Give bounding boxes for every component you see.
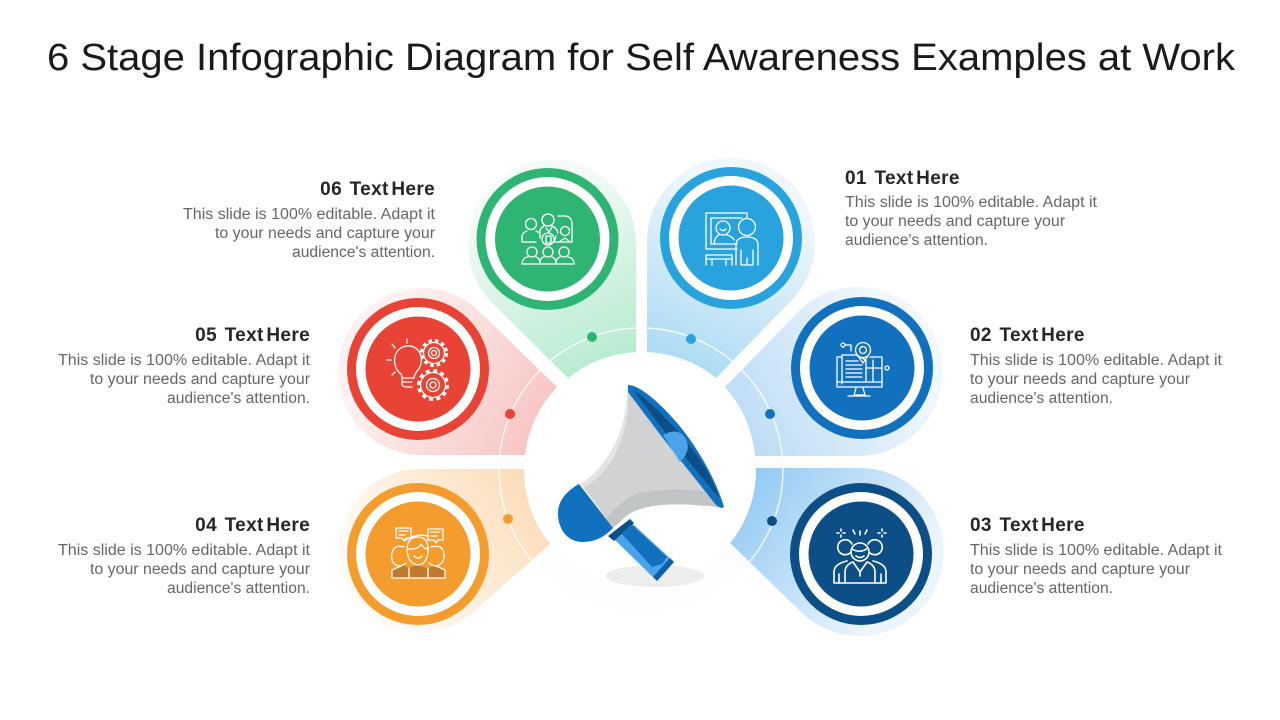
text block: 02 [970, 325, 1223, 407]
icon: three people talking [392, 528, 445, 578]
megaphone shadow [606, 565, 704, 587]
text block: 03: audience's attention. [970, 580, 1113, 597]
text block: 05 [58, 325, 311, 407]
petal: stage 04 orange [339, 469, 550, 632]
text block: 06: 06 Text Here [320, 179, 435, 200]
stage 06 badge [476, 168, 618, 310]
text block: 06: to your needs and capture your [215, 225, 435, 242]
text block: 03: This slide is 100% editable. Adapt it [970, 542, 1223, 559]
petal: stage 03 dark blue [730, 468, 944, 636]
megaphone collar [608, 519, 634, 541]
text block: 01: to your needs and capture your [845, 213, 1065, 230]
text block: 04: audience's attention. [167, 580, 310, 597]
text block: 01: audience's attention. [845, 232, 988, 249]
text block: 05: This slide is 100% editable. Adapt it [58, 352, 311, 369]
megaphone horn [581, 387, 718, 528]
megaphone handle [615, 524, 674, 581]
text block: 01 [845, 168, 1098, 249]
icon: light bulb and gears [387, 339, 448, 400]
petal: stage 01 light blue [647, 158, 815, 378]
text block: 05: 05 Text Here [195, 325, 310, 346]
petal: stage 02 blue [725, 287, 942, 456]
text block: 04 [58, 515, 311, 597]
megaphone back cap [558, 484, 613, 542]
text block: 03: to your needs and capture your [970, 561, 1190, 578]
text block: 04: This slide is 100% editable. Adapt it [58, 542, 311, 559]
icon: team of three people [834, 529, 886, 583]
stage dots [503, 332, 777, 526]
text block: 02: audience's attention. [970, 390, 1113, 407]
text block: 03 [970, 515, 1223, 597]
megaphone mouth [628, 385, 724, 508]
arc line around hub [499, 328, 783, 612]
text block: 01: 01 Text Here [845, 168, 960, 189]
stage 03 badge [790, 483, 932, 625]
petal: stage 05 red [338, 288, 557, 455]
text block: 02: This slide is 100% editable. Adapt it [970, 352, 1223, 369]
icon: audience and speakers [522, 214, 574, 264]
megaphone [558, 385, 724, 587]
stage 01 badge [660, 167, 802, 309]
title: 6 Stage Infographic Diagram for Self Awareness Examples at Work [47, 37, 1236, 79]
icon: monitor with document and pin [837, 342, 889, 396]
text block: 06 [183, 179, 436, 261]
faint backing disk [499, 328, 783, 612]
icon: person at mirror [706, 213, 758, 265]
stage 04 badge [347, 483, 489, 625]
text block: 03: 03 Text Here [970, 515, 1085, 536]
text block: 02: 02 Text Here [970, 325, 1085, 346]
text block: 04: to your needs and capture your [90, 561, 310, 578]
stage 05 badge [347, 298, 489, 440]
text block: 06: This slide is 100% editable. Adapt it [183, 206, 436, 223]
petal: stage 06 green [468, 160, 636, 378]
text block: 01: This slide is 100% editable. Adapt it [845, 194, 1098, 211]
text block: 05: to your needs and capture your [90, 371, 310, 388]
white hub [525, 354, 756, 586]
text block: 06: audience's attention. [292, 244, 435, 261]
text block: 05: audience's attention. [167, 390, 310, 407]
text block: 04: 04 Text Here [195, 515, 310, 536]
stage 02 badge [791, 297, 933, 439]
text block: 02: to your needs and capture your [970, 371, 1190, 388]
